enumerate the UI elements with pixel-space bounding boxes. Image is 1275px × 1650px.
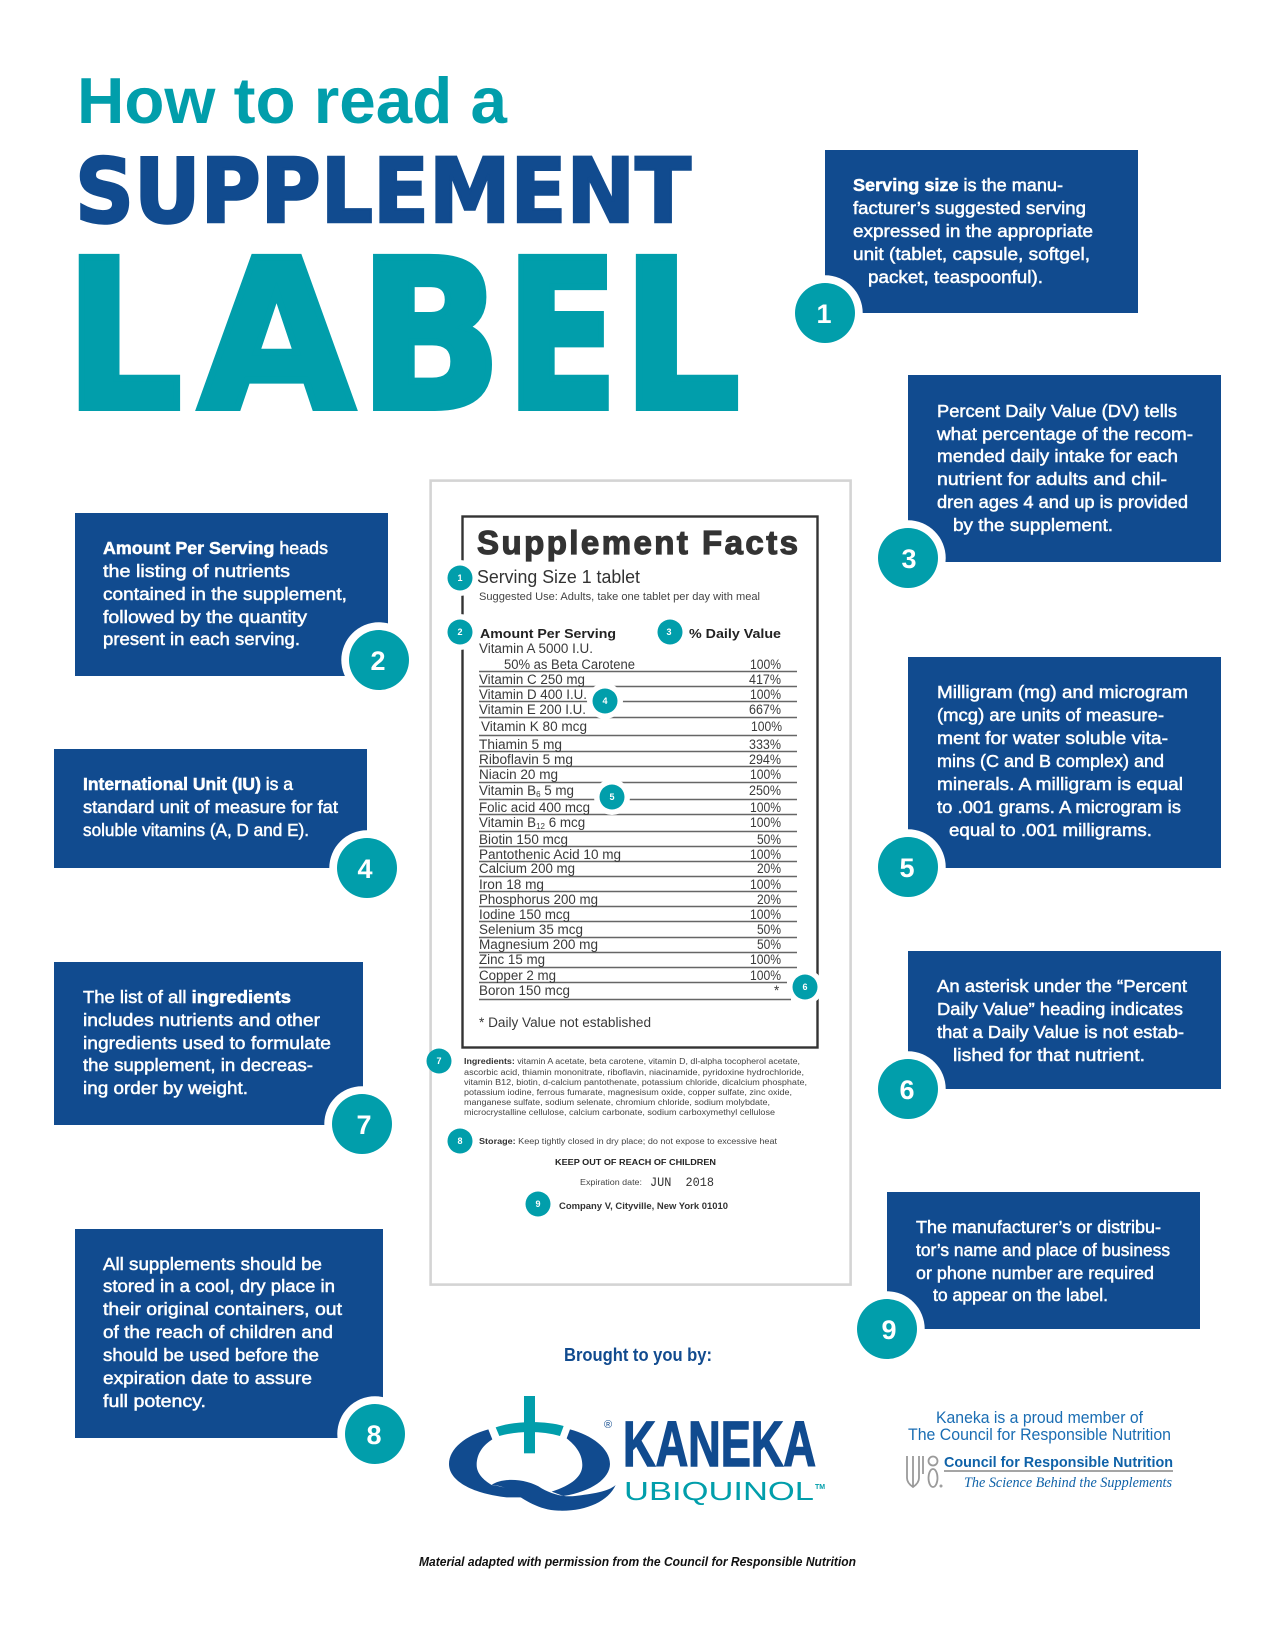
logo: Council for Responsible Nutrition: [907, 1454, 1173, 1491]
ingredients list: vitamin B12, biotin, d-calcium pantothenate, potassium chloride, dicalcium phosphate,: [464, 1078, 807, 1087]
warning: KEEP OUT OF REACH OF CHILDREN: [555, 1157, 716, 1167]
callout 4: international unit: [54, 749, 405, 906]
callout 7: ingredients: The list of all ingredients: [83, 987, 291, 1007]
storage line: Storage: Keep tightly closed in dry place; do not expose to excessive heat: [479, 1137, 778, 1146]
nutrient table: 100%: [750, 687, 781, 702]
marker 4: [587, 683, 623, 719]
marker 8: [448, 1128, 472, 1154]
callout 4: international unit: soluble vitamins (A, D and E).: [83, 820, 309, 840]
marker 6: [787, 969, 823, 1005]
nutrient table: 100%: [751, 719, 782, 734]
nutrient table: 100%: [750, 877, 781, 892]
organization name: Council for Responsible Nutrition: [944, 1454, 1173, 1471]
title line: How to read a: How to read a: [77, 64, 508, 137]
callout 7: ingredients: the supplement, in decreas-: [83, 1055, 313, 1075]
ingredients list: ascorbic acid, thiamin mononitrate, riboflavin, niacinamide, pyridoxine hydrochloride,: [464, 1068, 804, 1077]
callout 7: ingredients: ing order by weight.: [83, 1078, 248, 1098]
callout 6: asterisk: 6: [899, 1075, 915, 1105]
serving size: Serving Size 1 tablet: [477, 567, 640, 587]
nutrient table: 100%: [750, 657, 781, 672]
trademark: TM: [815, 1484, 825, 1491]
callout 3: percent daily value: nutrient for adults and chil-: [937, 469, 1167, 489]
callout 7: ingredients: includes nutrients and other: [83, 1010, 320, 1030]
callout 3: percent daily value: Percent Daily Value (DV) tells: [937, 401, 1177, 421]
callout 2: amount per serving: present in each serving.: [103, 629, 300, 649]
callout 3: percent daily value: dren ages 4 and up is provided: [937, 492, 1188, 512]
nutrient table: Iodine 150 mcg: [479, 907, 570, 922]
nutrient table: Zinc 15 mg: [479, 952, 545, 967]
callout 2: amount per serving: 2: [370, 646, 386, 676]
callout 9: manufacturer: The manufacturer’s or distribu-: [916, 1217, 1161, 1237]
title line: LABEL: [65, 216, 740, 456]
nutrient table: 100%: [750, 968, 781, 983]
callout 1: serving size: 1: [816, 299, 832, 329]
callout 3: percent daily value: what percentage of the recom-: [936, 424, 1193, 444]
nutrient table: 6 mcg: [545, 815, 585, 830]
label heading: Supplement Facts: [477, 524, 798, 561]
marker 1: [442, 560, 478, 596]
callout 8: storage: [75, 1229, 413, 1472]
callout 2: amount per serving: contained in the supplement,: [103, 584, 347, 604]
source credit: Material adapted with permission from the Council for Responsible Nutrition: [419, 1554, 856, 1569]
suggested use: Suggested Use: Adults, take one tablet per day with meal: [479, 591, 760, 603]
callout 8: storage: their original containers, out: [103, 1299, 342, 1319]
wordmark: KANEKA: [623, 1408, 816, 1480]
nutrient table: 20%: [757, 861, 781, 876]
callout 3: percent daily value: [870, 375, 1221, 596]
nutrient table: Vitamin K 80 mcg: [481, 719, 587, 734]
nutrient table: Magnesium 200 mg: [479, 937, 598, 952]
callout 6: asterisk: that a Daily Value is not estab-: [937, 1022, 1184, 1042]
sponsor heading: Brought to you by:: [564, 1345, 712, 1365]
nutrient table: 100%: [750, 952, 781, 967]
title line: LABEL: A: [199, 216, 354, 456]
marker 6: 6: [802, 982, 808, 992]
marker 4: 4: [602, 696, 608, 706]
nutrient table: Vitamin C 250 mg: [479, 672, 585, 687]
callout 2: amount per serving: the listing of nutrients: [103, 561, 290, 581]
callout 4: international unit: standard unit of measure for fat: [83, 797, 338, 817]
marker 7: [426, 1048, 452, 1074]
nutrient table: Vitamin B: [479, 783, 536, 798]
ingredients list: potassium iodine, ferrous fumarate, magnesisum oxide, copper sulfate, zinc oxide,: [464, 1088, 792, 1097]
nutrient table: *: [774, 983, 779, 998]
nutrient table: 294%: [749, 752, 781, 767]
expiration date: [580, 1176, 714, 1190]
callout 6: asterisk: [870, 951, 1221, 1127]
callout 1: serving size: [787, 150, 1138, 351]
icon: Q mark: [449, 1396, 616, 1511]
callout 5: milligram and microgram: 5: [899, 853, 915, 883]
title line: LABEL: E: [506, 216, 618, 456]
title: [65, 64, 740, 456]
registered mark: ®: [604, 1419, 612, 1431]
callout 7: ingredients: ingredients used to formulate: [83, 1033, 331, 1053]
callout 6: asterisk: lished for that nutrient.: [953, 1045, 1145, 1065]
marker 9: 9: [535, 1199, 541, 1209]
nutrient table: Vitamin D 400 I.U.: [479, 687, 587, 702]
title line: LABEL: B: [359, 216, 502, 456]
callout 8: storage: All supplements should be: [103, 1254, 322, 1274]
nutrient table: Pantothenic Acid 10 mg: [479, 847, 621, 862]
nutrient table: Folic acid 400 mcg: [479, 800, 590, 815]
callout 2: amount per serving: Amount Per Serving heads: [103, 538, 328, 558]
nutrient table: 5 mg: [541, 783, 574, 798]
ingredients list: microcrystalline cellulose, calcium carbonate, sodium carboxymethyl cellulose: [464, 1108, 776, 1117]
nutrient table: 50% as Beta Carotene: [504, 657, 635, 672]
marker 9: [526, 1192, 550, 1216]
callout 8: storage: stored in a cool, dry place in: [103, 1276, 335, 1296]
nutrient table: 100%: [750, 767, 781, 782]
nutrient table: Copper 2 mg: [479, 968, 556, 983]
nutrient table: 250%: [749, 783, 781, 798]
callout 5: milligram and microgram: mins (C and B complex) and: [937, 751, 1164, 771]
nutrient table: 100%: [750, 815, 781, 830]
callout 7: ingredients: 7: [356, 1110, 372, 1140]
marker 3: 3: [666, 627, 672, 637]
nutrient table: 667%: [749, 702, 781, 717]
callout 2: amount per serving: [75, 513, 417, 698]
callout 8: storage: 8: [366, 1420, 382, 1450]
nutrient table: Biotin 150 mcg: [479, 832, 568, 847]
nutrient table: Calcium 200 mg: [479, 861, 575, 876]
marker 1: 1: [457, 573, 463, 583]
member statement: The Council for Responsible Nutrition: [908, 1425, 1171, 1444]
ingredients list: [464, 1057, 807, 1117]
ingredients list: Ingredients: vitamin A acetate, beta carotene, vitamin D, dl-alpha tocopherol acetate,: [464, 1057, 800, 1066]
nutrient table: 417%: [749, 672, 781, 687]
marker 2: 2: [457, 627, 463, 637]
nutrient table: Boron 150 mcg: [479, 983, 570, 998]
nutrient table: 333%: [749, 737, 781, 752]
product name: UBIQUINOL: [624, 1476, 814, 1506]
callout 2: amount per serving: followed by the quantity: [103, 607, 307, 627]
callout 4: international unit: International Unit (IU) is a: [83, 774, 293, 794]
nutrient table: 100%: [750, 847, 781, 862]
callout 8: storage: of the reach of children and: [103, 1322, 333, 1342]
nutrient table: Vitamin B: [479, 815, 536, 830]
callout 5: milligram and microgram: equal to .001 milligrams.: [949, 820, 1152, 840]
callout 5: milligram and microgram: (mcg) are units of measure-: [937, 705, 1164, 725]
company: Company V, Cityville, New York 01010: [559, 1201, 728, 1211]
callout 6: asterisk: An asterisk under the “Percent: [937, 976, 1187, 996]
callout 5: milligram and microgram: [870, 657, 1221, 905]
nutrient table: Phosphorus 200 mg: [479, 892, 598, 907]
column heading: amount per serving: Amount Per Serving: [480, 626, 616, 641]
callout 9: manufacturer: tor’s name and place of business: [916, 1240, 1170, 1260]
nutrient table: 20%: [757, 892, 781, 907]
callout 1: serving size: packet, teaspoonful).: [868, 267, 1043, 287]
icon: fork and spoon: [907, 1456, 942, 1487]
marker 8: 8: [457, 1136, 463, 1146]
marker 5: [594, 779, 630, 815]
callout 6: asterisk: Daily Value” heading indicates: [937, 999, 1183, 1019]
callout 3: percent daily value: mended daily intake for each: [937, 446, 1178, 466]
member statement: Kaneka is a proud member of: [936, 1408, 1143, 1427]
nutrient table: Niacin 20 mg: [479, 767, 558, 782]
nutrient table: 50%: [757, 832, 781, 847]
callout 9: manufacturer: [849, 1192, 1200, 1367]
marker 7: 7: [436, 1056, 442, 1066]
callout 7: ingredients: [54, 962, 400, 1162]
column heading: percent daily value: % Daily Value: [689, 626, 781, 641]
nutrient table: Selenium 35 mcg: [479, 922, 583, 937]
footnote: * Daily Value not established: [479, 1015, 651, 1030]
nutrient table: 100%: [750, 907, 781, 922]
callout 3: percent daily value: by the supplement.: [953, 515, 1113, 535]
callout 5: milligram and microgram: ment for water soluble vita-: [937, 728, 1168, 748]
callout 1: serving size: expressed in the appropriate: [853, 221, 1093, 241]
nutrient table: Thiamin 5 mg: [479, 737, 562, 752]
callout 8: storage: full potency.: [103, 1391, 206, 1411]
callout 3: percent daily value: 3: [901, 544, 917, 574]
title line: LABEL: L: [65, 216, 182, 456]
marker 5: 5: [609, 792, 615, 802]
nutrient table: 6: [536, 790, 541, 799]
nutrient table: Iron 18 mg: [479, 877, 544, 892]
marker 2: [442, 614, 478, 650]
nutrient table: 50%: [757, 922, 781, 937]
callout 5: milligram and microgram: minerals. A milligram is equal: [937, 774, 1183, 794]
facts box border: [462, 516, 818, 1048]
ingredients list: manganese sulfate, sodium selenate, chromium chloride, sodium molybdate,: [464, 1098, 770, 1107]
nutrient table: Vitamin A 5000 I.U.: [479, 641, 593, 656]
callout 9: manufacturer: 9: [881, 1315, 897, 1345]
expiration date: Expiration date:: [580, 1178, 642, 1187]
callout 8: storage: expiration date to assure: [103, 1368, 312, 1388]
nutrient table: Vitamin E 200 I.U.: [479, 702, 586, 717]
nutrient table: [479, 641, 782, 998]
title line: SUPPLEMENT: SUPPLEMENT: [75, 139, 691, 243]
logo: Kaneka Ubiquinol: [449, 1396, 825, 1511]
nutrient table: Riboflavin 5 mg: [479, 752, 573, 767]
callout 1: serving size: Serving size is the manu-: [853, 175, 1063, 195]
callout 5: milligram and microgram: Milligram (mg) and microgram: [937, 682, 1188, 702]
member statement: [908, 1408, 1171, 1444]
callout 9: manufacturer: to appear on the label.: [933, 1285, 1108, 1305]
callout 1: serving size: facturer’s suggested serving: [853, 198, 1086, 218]
callout 4: international unit: 4: [357, 854, 373, 884]
nutrient table: 100%: [750, 800, 781, 815]
callout 8: storage: should be used before the: [103, 1345, 319, 1365]
tagline: The Science Behind the Supplements: [964, 1475, 1172, 1491]
callout 5: milligram and microgram: to .001 grams. A microgram is: [937, 797, 1181, 817]
panel: supplement facts label: [426, 481, 851, 1285]
expiration date: JUN 2018: [650, 1176, 714, 1190]
callout 1: serving size: unit (tablet, capsule, softgel,: [853, 244, 1090, 264]
marker 3: [658, 620, 682, 644]
callout 9: manufacturer: or phone number are required: [916, 1263, 1154, 1283]
nutrient table: 50%: [757, 937, 781, 952]
nutrient table: 12: [536, 822, 546, 831]
title line: LABEL: L: [622, 216, 740, 456]
nutrient rules: [479, 672, 797, 1000]
